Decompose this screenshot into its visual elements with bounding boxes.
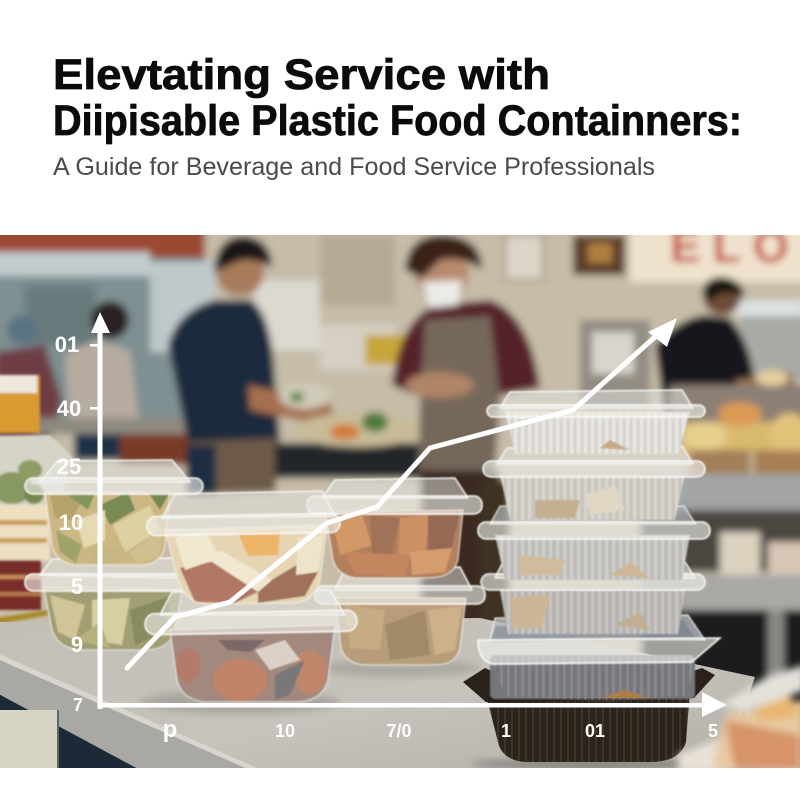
left figures xyxy=(0,345,62,440)
person three: right navy xyxy=(655,315,755,420)
y axis labels xyxy=(55,332,83,715)
y axis ticks xyxy=(90,344,98,410)
y axis labels: 9 xyxy=(71,632,83,657)
y axis labels: 25 xyxy=(57,454,81,479)
chart: overlay growth chart xyxy=(55,312,727,743)
stack container 5 bottom xyxy=(478,615,720,702)
stack container 2 xyxy=(483,446,705,520)
right shelves xyxy=(640,474,800,510)
food tray in back xyxy=(275,443,495,478)
left side stacked trays xyxy=(0,375,72,625)
sign lettering: ELO xyxy=(670,220,800,272)
y axis labels: 10 xyxy=(59,510,83,535)
x axis labels: 1 xyxy=(501,721,511,741)
container: centre right tan food xyxy=(315,567,485,665)
container: centre right orange food xyxy=(307,478,482,578)
stacked clear containers xyxy=(478,390,720,702)
stack container 1 top xyxy=(487,390,705,454)
person one: navy shirt xyxy=(168,300,280,442)
container: centre top cheese and meat xyxy=(147,491,340,604)
x axis labels: 01 xyxy=(585,721,605,741)
white mask above photo xyxy=(0,190,800,235)
y axis labels: 5 xyxy=(71,574,83,599)
y axis labels: 40 xyxy=(57,396,81,421)
white band below photo xyxy=(0,768,800,800)
title: Diipisable Plastic Food Containners: xyxy=(53,97,742,145)
person two: maroon shirt xyxy=(392,300,540,395)
y axis with arrowhead xyxy=(91,312,110,709)
black tray under stack xyxy=(463,668,715,762)
right counter food xyxy=(670,385,800,430)
marble counter xyxy=(0,618,755,770)
stack container 4 xyxy=(481,562,705,634)
x axis labels: 5 xyxy=(708,721,718,741)
foreground blurred container xyxy=(678,665,800,775)
x axis labels: 10 xyxy=(275,721,295,741)
panel: food service photo scene xyxy=(0,190,800,800)
title xyxy=(53,51,742,145)
stack container 3 xyxy=(478,506,710,580)
x axis labels xyxy=(163,716,718,743)
blurred restaurant background xyxy=(0,220,800,785)
subtitle: A Guide for Beverage and Food Service Professionals xyxy=(53,153,655,181)
y axis labels: 7 xyxy=(73,695,83,715)
x axis labels: 7/0 xyxy=(386,721,412,741)
container: centre bottom pink food xyxy=(145,590,357,702)
trend line arrow xyxy=(127,318,677,668)
container: bottom left olive food xyxy=(25,558,190,650)
x axis with arrowhead xyxy=(98,692,727,717)
x axis labels: p xyxy=(163,716,177,743)
title: Elevtating Service with xyxy=(53,51,550,99)
container: top left green food xyxy=(25,460,203,565)
y axis labels: 01 xyxy=(55,332,79,357)
